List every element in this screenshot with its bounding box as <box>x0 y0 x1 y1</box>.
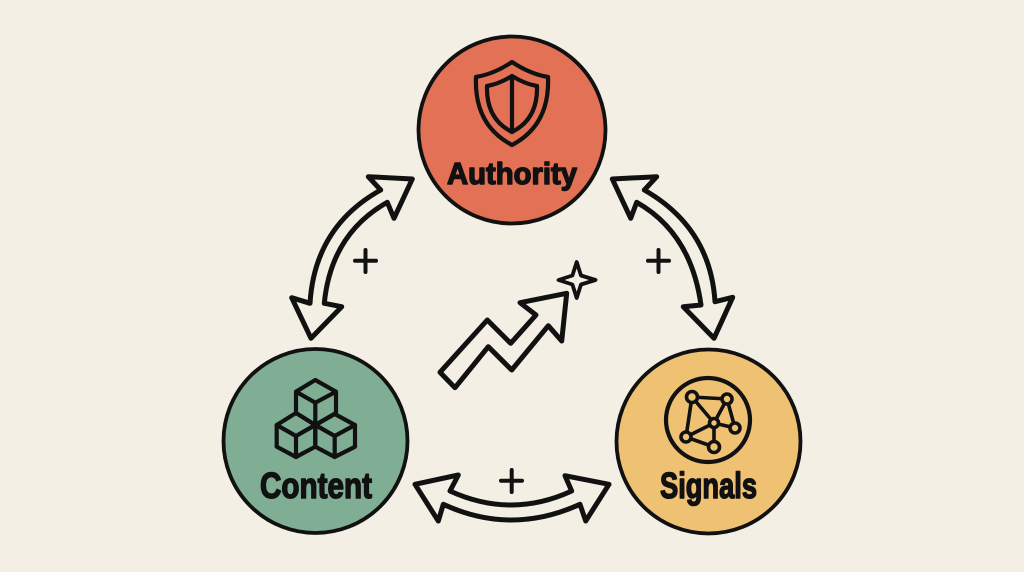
icon: shield <box>476 62 548 145</box>
panel: authority node <box>418 36 606 224</box>
label: Authority: Authority <box>447 156 578 191</box>
icon: stacked cubes <box>277 380 355 457</box>
arrow: authority to content <box>292 177 412 338</box>
plus: left <box>355 250 376 272</box>
icon: growth arrow <box>440 293 567 388</box>
panel: signals node <box>616 350 800 534</box>
content circle <box>224 349 408 533</box>
plus: right <box>648 250 669 272</box>
plus: bottom <box>501 470 522 492</box>
icon: network in circle <box>666 378 750 462</box>
icon: sparkle <box>558 262 596 298</box>
signals circle <box>616 350 800 534</box>
authority circle <box>418 36 606 224</box>
label: Content: Content <box>260 465 372 506</box>
arrow: authority to signals <box>612 177 733 338</box>
arrow: content to signals <box>415 475 609 521</box>
panel: content node <box>224 349 408 533</box>
label: Signals: Signals <box>660 465 757 506</box>
